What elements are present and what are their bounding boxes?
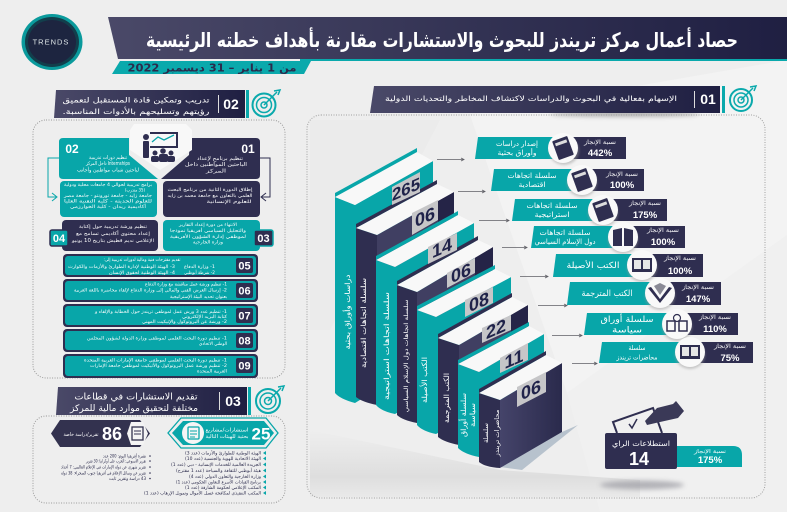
row 06: بعنوان تحديد البيئة الإستراتيجية: [170, 295, 227, 300]
icon: v-shaped book: [648, 283, 672, 303]
box 01 lower: للعلوم الإنسانية: [206, 199, 252, 205]
list: report types: [61, 452, 151, 482]
stat hexagon: 25 consultations: بحثية للهيئات التالية: [206, 434, 248, 440]
book number tags: 06: [451, 258, 471, 287]
book 4: political islam trends: [397, 236, 493, 423]
callout: original books: 100%: [668, 266, 693, 277]
connector arrows: [437, 158, 597, 365]
book number tags: 265: [392, 173, 420, 205]
callout: research papers: إصدار دراسات: [496, 140, 538, 148]
row 08: 1- تنظيم دورة البحث العلمي لموظفي وزارة الدولة لشؤون المجلس: [87, 336, 227, 342]
box 03: لموظفي إدارة الشؤون الأفريقية: [170, 233, 246, 240]
row 07: 1- تنظيم عدد 3 ورش عمل لموظفي تريندز حول الخطابة والإلقاء و: [94, 309, 227, 315]
section 02 heading: [54, 90, 280, 118]
icon: book: [571, 168, 593, 192]
list: client entities: [144, 450, 266, 496]
callout: economic trends: سلسلة اتجاهات: [508, 172, 557, 180]
box 01 lower: العلمي بالتعاون مع جامعة محمد بن زايد: [168, 193, 252, 199]
row 09: 09: [238, 360, 251, 372]
list: client entities: هيئة أبوظبي للثقافة والسياحة (عدد 1 مقترح): [176, 467, 262, 474]
callout: trends lectures: [599, 337, 753, 369]
list: client entities: المكتب الإعلامي لحكومة الشارقة (عدد 1): [185, 485, 261, 491]
callout: political islam trends: 100%: [651, 237, 676, 248]
date ribbon: من 1 يناير – 31 ديسمبر 2022: [128, 62, 297, 74]
row 05: 1- وزارة الدفاع: [184, 264, 215, 270]
stat hexagon: 25 consultations: [168, 418, 278, 448]
row 05: 3- الهيئة الوطنية لإدارة الطوارئ والأزمات والكوارث: [68, 263, 175, 270]
book 5: original books: الكتب الأصيلة: [419, 357, 429, 403]
icon: document with person: [182, 422, 204, 444]
list: report types: تقرير شهري عن دولة الإمارات في الإعلام العالمي: 7 أعداد: [61, 464, 147, 470]
stat hexagon: 86 reports: [51, 420, 150, 447]
book number tags: 22: [486, 314, 506, 343]
callout: strategic trends: [512, 195, 667, 227]
callout: original books: نسبة الإنجاز: [663, 256, 696, 262]
arrow: 02 to lower: [48, 158, 60, 201]
row 08: الوطني الاتحادي: [199, 342, 227, 347]
box 03: [163, 220, 273, 251]
box 02: Internships داخل المركز: [85, 161, 130, 167]
book 5: original books: [417, 265, 511, 434]
book 2: economic trends: سلسلة اتجاهات اقتصادية: [359, 278, 368, 368]
box 02: تنظيم دورات تدريبية: [89, 155, 128, 161]
list: client entities: وزارة الخارجية والتعاون الدولي (عدد 4): [189, 474, 261, 480]
callout: translated books: [567, 278, 721, 310]
row 08: 08: [238, 336, 251, 348]
icon: open book: [680, 345, 700, 359]
book number tags: 11: [504, 345, 524, 373]
icon: open book: [613, 228, 633, 246]
section 03 heading: تقديم الاستشارات في قطاعات: [74, 392, 198, 402]
callout: original books: [553, 250, 703, 282]
book 3: strategic trends: سلسلة اتجاهات استراتيجية: [382, 292, 391, 400]
book number tags: 14: [432, 233, 452, 262]
badge 04: 04: [53, 233, 66, 245]
book number tags: 06: [415, 202, 435, 231]
callout: trends lectures: 75%: [720, 353, 740, 364]
box 04: تنظيم ورشة تدريبية حول إكتابة: [79, 224, 148, 230]
section 01 heading: 01: [700, 91, 716, 107]
callout: policy papers: نسبة الإنجاز: [698, 315, 731, 321]
book number tags: 06: [521, 375, 541, 404]
list: report types: تقرير الأسبوعي: الحرب على أوكرانيا: 30 تقرير: [85, 458, 146, 464]
opinion polls card: استطلاعات الراي: [612, 439, 670, 448]
box 04: [50, 220, 158, 251]
icon: idea book: [667, 314, 687, 331]
book 8: trends lectures: سلسلة: [482, 423, 490, 443]
callout: economic trends: [491, 165, 644, 197]
opinion polls card: 14: [629, 449, 649, 469]
list: client entities: الهيئة الاتحادية للهوية والجنسية (عدد 10): [185, 456, 261, 462]
box 03: والتحليل السياسي أفريقيا نموذجا: [170, 227, 246, 234]
icon: report: [127, 422, 148, 445]
icon: target 01: [730, 86, 756, 111]
row 06: 1- تنظيم ورشة عمل مناقشة مع وزارة الدفاع: [145, 282, 227, 288]
icon: hand voting: [613, 401, 684, 433]
book 2: economic trends: [356, 180, 454, 405]
callout: policy papers: [584, 309, 738, 341]
callout: political islam trends: [531, 222, 685, 254]
book 6: translated books: الكتب المترجمة: [442, 373, 451, 423]
row 07: 2- ورشة عن البروتوكول والإتيكيت المهني: [142, 319, 227, 325]
row 06: 06: [238, 286, 251, 298]
opinion polls card: [600, 401, 742, 490]
box 04: إعداد محتوى أكاديمي تسامح مع: [76, 230, 151, 237]
callout: trends lectures: محاضرات تريندز: [616, 354, 658, 362]
list: client entities: المكتب التنفيذي لمكافحة غسل الأموال وتمويل الإرهاب (عدد 1): [144, 490, 261, 496]
book 8: trends lectures: محاضرات تريندز: [493, 409, 501, 458]
book 6: translated books: [438, 293, 528, 445]
book 4: political islam trends: سلسلة اتجاهات دول الإسلام السياسي: [404, 299, 410, 412]
list: report types: 43 دراسة وتقرير ثابت: [109, 476, 146, 482]
callout: economic trends: نسبة الإنجاز: [605, 172, 638, 178]
box 03: الانتهاء من دورة إعداد التقارير: [178, 223, 237, 228]
callout: economic trends: 100%: [610, 180, 635, 191]
callout: strategic trends: نسبة الإنجاز: [628, 201, 661, 207]
box 02 lower: أكاديمية ربدان - كلية الخوارزمي: [70, 203, 147, 210]
box 01: الباحثين المواطنين داخل: [185, 162, 247, 168]
box 02 lower: جامعة زايد - جامعة تورونتو - جامعة مصر: [63, 194, 152, 199]
row 09: 1- تنظيم دورة البحث العلمي لموظفي جامعة الإمارات العربية المتحدة: [84, 358, 227, 364]
box 01 lower: إطلاق الدورة الثانية من برنامج البحث: [168, 187, 253, 193]
callout: translated books: 147%: [686, 294, 711, 305]
logo: TRENDS: TRENDS: [33, 38, 69, 46]
box 01: تنظيم برنامج لإعداد: [197, 156, 244, 162]
book 1: studies and papers: دراسات وأوراق بحثية: [342, 274, 352, 350]
section 02 dotted panel: [33, 120, 285, 378]
row 09: 2- تنظيم ورشة عمل البروتوكول والأتيكيت لموظفي جامعة الإمارات: [90, 362, 227, 369]
book 1: studies and papers: [335, 148, 433, 403]
box 01: [161, 138, 260, 179]
row 07: 07: [238, 310, 251, 322]
row 05: تقديم مقترحات فنية ومالية لدورات تدريبية إلى:: [104, 258, 181, 263]
book 7: policy papers: [458, 322, 544, 457]
row 07: كتابة البريد الإلكتروني: [182, 314, 228, 320]
title banner: [108, 17, 787, 61]
callout: research papers: [475, 133, 626, 165]
box 02: [59, 138, 158, 179]
callout: original books: الكتب الأصيلة: [566, 260, 620, 271]
icon: target 02: [252, 90, 280, 116]
callout: political islam trends: نسبة الإنجاز: [646, 228, 679, 234]
callout: strategic trends: استراتيجية: [534, 211, 570, 219]
callout: political islam trends: دول الإسلام السياسي: [534, 238, 596, 246]
row 06: 2- إرسال العرض الفني والمالي إلى وزارة الدفاع لإلقاء محاضرة باللغة العربية: [74, 288, 227, 294]
box 03: وزارة الخارجية: [193, 240, 223, 246]
list: report types: تقرير عن وسائل الإعلام في أفريقيا جنوب الصحراء: 38 دولة: [61, 470, 147, 476]
section 03 heading: 03: [225, 393, 241, 409]
book 8: trends lectures: [479, 351, 562, 468]
row 05: [63, 254, 258, 277]
box 01 lower: [163, 181, 260, 217]
callout: economic trends: اقتصادية: [518, 181, 546, 189]
icon: target 03: [256, 386, 284, 413]
presentation icon tab: [130, 124, 192, 170]
callout: policy papers: سلسلة أوراق: [600, 313, 654, 325]
callout: political islam trends: سلسلة اتجاهات: [540, 229, 591, 237]
callout: strategic trends: سلسلة اتجاهات: [526, 202, 578, 210]
callout: translated books: الكتب المترجمة: [582, 289, 632, 299]
box 02: لباحثين شباب مواطنين وأجانب: [77, 166, 139, 174]
icon: open book: [632, 258, 652, 272]
box 02: 02: [65, 142, 79, 156]
section 01 dotted panel: [307, 115, 765, 498]
section 01 heading: الإسهام بفعالية في البحوث والدراسات لاكتشاف المخاطر والتحديات الدولية: [385, 94, 677, 103]
row 06: [63, 279, 258, 302]
callout: policy papers: سياسة: [612, 326, 642, 336]
row 05: 05: [238, 260, 251, 272]
row 09: العربية المتحدة: [197, 370, 227, 374]
icon: presenter with audience: [143, 132, 178, 162]
icon: book: [552, 136, 574, 160]
book 7: policy papers: سياسة: [468, 403, 477, 427]
callout: research papers: وأوراق بحثية: [498, 148, 536, 157]
callout: trends lectures: نسبة الإنجاز: [713, 344, 746, 350]
book number tags: 08: [469, 287, 489, 316]
list: report types: نشرة أفريقيا اليوم: 200 عدد: [103, 452, 146, 460]
box 02 lower: [60, 181, 157, 217]
section 02 heading: 02: [223, 96, 239, 112]
opinion polls card: 175%: [698, 455, 723, 466]
stat hexagon: 86 reports: تقرير/دراسة خاصة: [64, 432, 99, 438]
stat hexagon: 86 reports: 86: [102, 424, 122, 444]
section 03 heading: [56, 386, 284, 415]
stat hexagon: 25 consultations: 25: [252, 424, 270, 444]
box 01: المركز: [205, 168, 226, 174]
row 08: [63, 329, 258, 352]
badge 03: 03: [257, 233, 270, 245]
row 05: 2- شرطة أبوظبي: [184, 269, 215, 276]
callout: translated books: نسبة الإنجاز: [681, 285, 714, 291]
row 05: 4- الهيئة الوطنية لحقوق الإنسان: [109, 270, 175, 276]
arrow: 01 to lower: [258, 158, 270, 201]
book 7: policy papers: سلسلة أوراق: [458, 393, 468, 437]
icon: book: [592, 198, 614, 222]
section 02 heading: رؤيتهم وتسليحهم بالأدوات المناسبة.: [62, 106, 210, 116]
section 02 heading: تدريب وتمكين قادة المستقبل لتعميق: [62, 96, 210, 104]
list: client entities: الهيئة الوطنية للطوارئ والأزمات (عدد 3): [185, 450, 261, 456]
callout: research papers: 442%: [588, 148, 613, 159]
callout: strategic trends: 175%: [633, 210, 658, 221]
logo: TRENDS: [22, 14, 82, 70]
callout: trends lectures: سلسلة: [628, 344, 646, 352]
opinion polls card: نسبة الإنجاز: [693, 449, 727, 455]
callout: policy papers: 110%: [703, 324, 727, 335]
row 09: [63, 354, 258, 378]
row 07: [63, 304, 258, 327]
list: client entities: الجريدة العالمية للخدمات الإنسانية - دبي (عدد 1): [171, 462, 261, 468]
section 01 heading: [370, 86, 756, 116]
books chart: [335, 148, 578, 470]
callout: research papers: نسبة الإنجاز: [583, 140, 616, 146]
box 02 lower: برامج تدريبية لحوالي 4 جامعات محلية ودولية: [64, 182, 152, 188]
box 01: 01: [241, 142, 255, 156]
box 02 lower: للعلوم الحديثة - كلية التقنية العليا: [64, 198, 152, 204]
box 02 lower: (35 متدرب): [125, 188, 145, 194]
section 03 heading: مختلفة لتحقيق موارد مالية للمركز: [69, 404, 198, 414]
book 3: strategic trends: [376, 211, 474, 414]
box 04: الإعلامي نديم قطيش بتاريخ 10 يونيو: [71, 238, 154, 244]
stat hexagon: 25 consultations: استشارات/مشاريع: [206, 428, 248, 434]
list: client entities: برنامج القيادات الأسرع للتعاون الحكومي (عدد 1): [176, 478, 261, 486]
book number tags: [392, 172, 546, 407]
section 03 dotted panel: [33, 416, 285, 503]
